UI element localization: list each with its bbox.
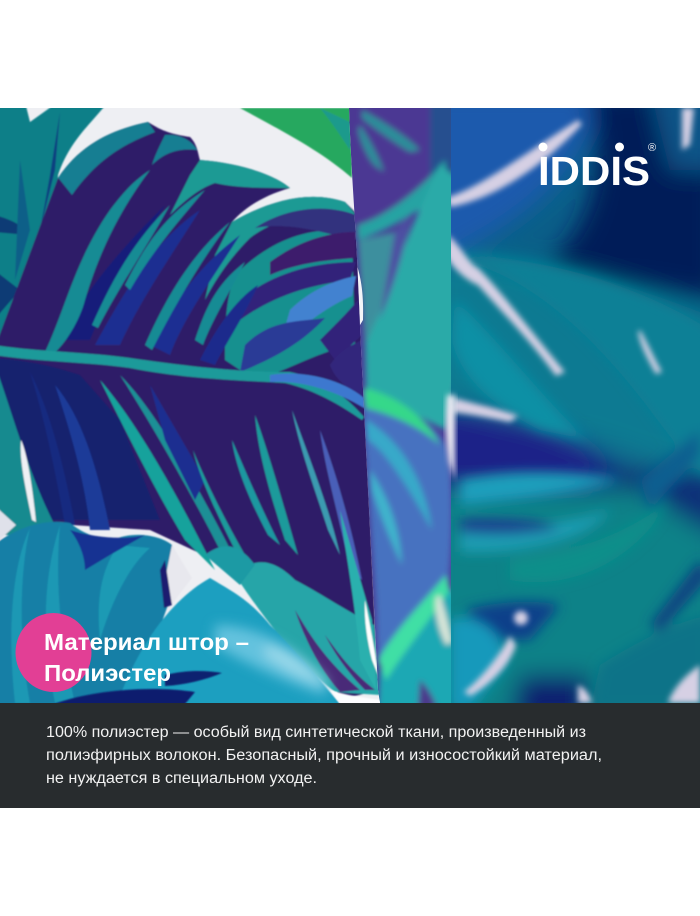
body text: 100% полиэстер — особый вид синтетической ткани, произведенный из — [46, 724, 586, 741]
white gap between folds — [446, 395, 455, 480]
green leaf — [240, 108, 352, 178]
purple feather bands — [255, 209, 356, 240]
front curtain, sharp leaf print — [0, 102, 382, 710]
title: Полиэстер — [44, 660, 171, 686]
white slits — [21, 440, 36, 522]
teal mass lower right — [235, 562, 380, 695]
teal veins, upper — [45, 170, 245, 355]
logo: IDDIS: ® — [648, 142, 656, 154]
midrib — [0, 345, 364, 420]
logo: IDDIS: IDDIS — [538, 148, 650, 194]
title — [44, 629, 249, 686]
body text: полиэфирных волокон. Безопасный, прочный и износостойкий материал, — [46, 747, 602, 764]
upper-left teal leaf — [0, 102, 108, 350]
right blurred curtain fold — [451, 108, 700, 703]
body text: не нуждается в специальном уходе. — [46, 770, 317, 787]
middle curtain fold — [349, 108, 451, 703]
title: Материал штор – — [44, 629, 249, 655]
lower left blue leaves — [0, 520, 173, 703]
photo: curtain with tropical leaves — [0, 90, 700, 720]
pink accent circle — [16, 613, 92, 692]
body text — [46, 724, 602, 787]
blue feathers — [66, 208, 162, 340]
thin teal feathers lower right — [193, 450, 245, 555]
lower left feathers — [0, 358, 160, 520]
teal lobe edges — [58, 122, 155, 195]
bottom dark text band — [0, 703, 700, 808]
lower right cyan leaf — [115, 578, 345, 710]
white sliver at front edge — [358, 267, 364, 325]
big purple leaf, upper lobe — [0, 122, 378, 700]
